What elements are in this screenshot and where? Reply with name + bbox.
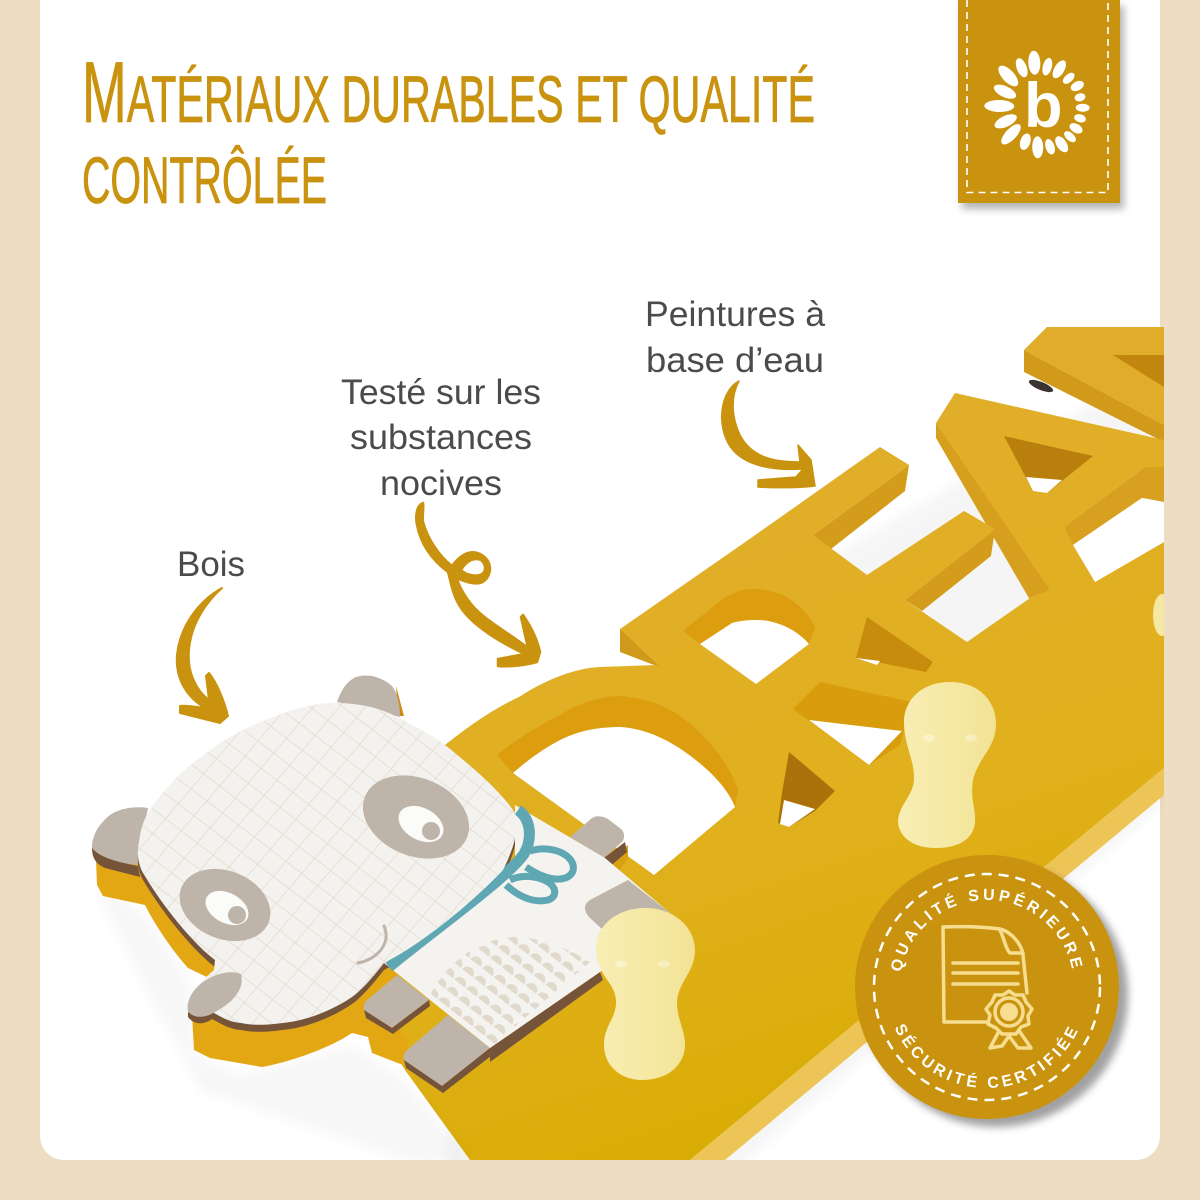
letter hole 2 [683,589,815,684]
badge top text: QUALITÉ SUPÉRIEURE [891,888,1082,971]
board front edge [690,768,1164,1160]
panda ear left [92,807,148,865]
label: Peintures à base d'eau [645,295,826,380]
E arm side faces [813,465,909,549]
panda nose [188,972,242,1017]
label: Peintures à base d'eau: Peintures à [645,295,826,334]
panda ply edge [138,838,515,1032]
panda collar and bow [389,810,573,967]
A crossbar hole [1064,467,1164,582]
icon: brand flower logo [984,50,1090,158]
label: Testé sur les substances nocives: Testé sur les [341,373,541,412]
label: Testé sur les substances nocives: substances [350,418,532,457]
panda [92,675,672,1165]
label: Testé sur les substances nocives: nocives [380,464,502,503]
arrow: Testé sur les substances nocives [416,503,540,666]
top right letter piece [1024,327,1164,442]
title [82,45,815,217]
panda ear top [337,675,400,717]
panda body edge [490,972,603,1062]
panda yellow backing [96,862,405,1067]
triangle hole 5 [778,752,835,827]
panda smile [358,926,386,963]
big letter hole [497,696,738,875]
icon: certificate [943,927,1032,1048]
panda foot 2 [404,1015,490,1086]
arrow: Bois [177,588,228,723]
label: Bois: Bois [177,545,245,584]
triangle hole 3 [856,617,933,672]
panda eye left [180,868,270,942]
icon: brand flower logo: b [1024,71,1062,141]
slot hole 4 [793,682,912,765]
product photo: wooden coat rack [92,327,1171,1178]
panda head [138,703,517,1025]
panda shadow [151,957,434,1147]
board top face [395,393,1164,1160]
A triangle hole [1004,436,1093,493]
knob right centre [898,682,996,848]
badge bottom text: SÉCURITÉ CERTIFIÉE [896,1024,1078,1088]
label: Testé sur les substances nocives [341,373,541,503]
panda arm upper right [570,816,624,858]
title: MATÉRIAUX DURABLES ET QUALITÉ [82,45,815,141]
board shadow [456,410,1154,1160]
label: Peintures à base d'eau: base d’eau [646,341,824,380]
logo tag [958,0,1124,209]
panda body [384,805,672,1048]
panda eye right [363,775,469,859]
panda belly scallops [431,937,590,1048]
panda arm lower right [585,880,670,932]
knob right [1153,594,1164,636]
title: CONTRÔLÉE [82,143,327,217]
arrow: Peintures à base d'eau [722,381,815,488]
panda foot 1 [363,975,429,1027]
badge: qualité supérieure [855,855,1133,1132]
knob left [596,908,695,1080]
